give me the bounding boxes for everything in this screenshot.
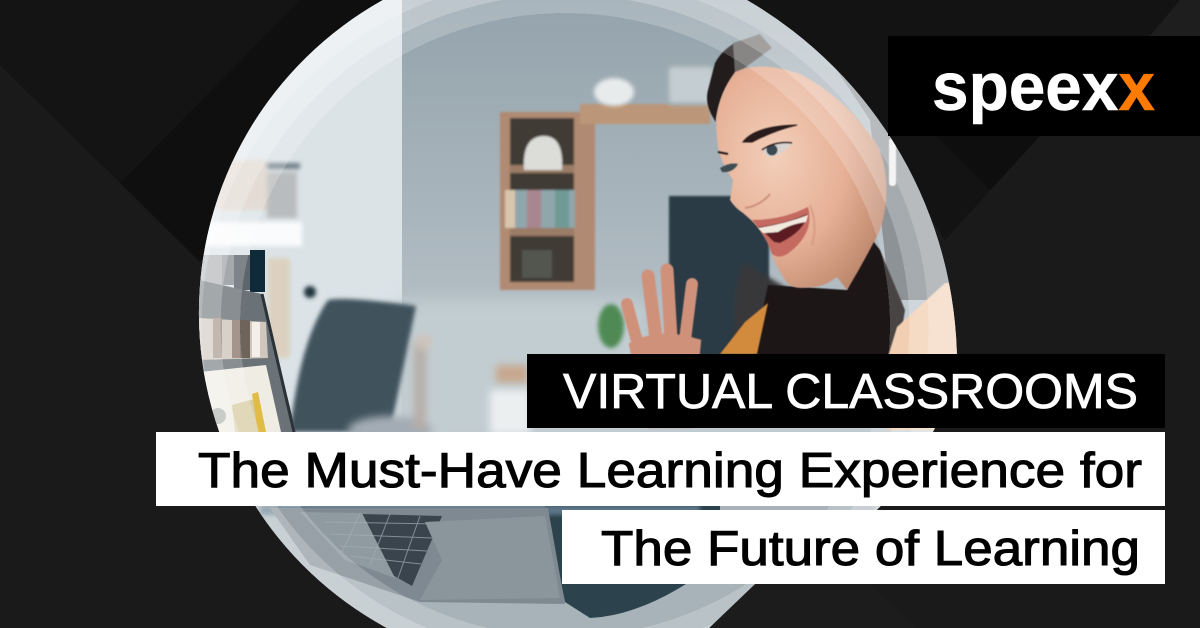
sofa and stool bbox=[348, 334, 530, 444]
open laptop screen bbox=[190, 250, 296, 432]
waving hand bbox=[627, 270, 698, 425]
hair behind the head bbox=[734, 241, 906, 354]
vase and frame on shelf bbox=[594, 66, 714, 106]
chair bbox=[290, 299, 416, 432]
subtitle line 1 bbox=[156, 432, 1165, 506]
subtitle line 2 bbox=[562, 510, 1165, 584]
mouth bbox=[752, 207, 810, 257]
shoulder bbox=[887, 283, 965, 430]
earbud bbox=[889, 138, 896, 186]
circular photo: woman waving at a laptop bbox=[198, 0, 957, 628]
table and laptop base with keyboard and trackpad bbox=[256, 506, 881, 628]
facial details bbox=[718, 125, 815, 257]
heading: virtual classrooms bbox=[527, 354, 1165, 428]
plant bbox=[598, 304, 624, 348]
translucent ring bands along the edge bbox=[198, 0, 957, 628]
orange top bbox=[720, 303, 768, 354]
blurred room: walls bbox=[190, 0, 970, 628]
subtitle line 2: The Future of Learning bbox=[601, 522, 1140, 576]
speexx logo bbox=[888, 36, 1200, 136]
wooden bookcase bbox=[500, 104, 710, 290]
blurred left wall shelf bbox=[200, 160, 316, 358]
speexx logo: speexx bbox=[932, 49, 1155, 125]
subtitle line 1: The Must-Have Learning Experience for bbox=[198, 444, 1142, 498]
eyes and brows bbox=[743, 125, 797, 142]
heading: virtual classrooms: VIRTUAL CLASSROOMS bbox=[563, 365, 1138, 419]
hair above the face bbox=[706, 44, 736, 122]
face bbox=[716, 66, 886, 290]
dark TV bbox=[669, 196, 769, 366]
nose shadow bbox=[745, 194, 770, 208]
